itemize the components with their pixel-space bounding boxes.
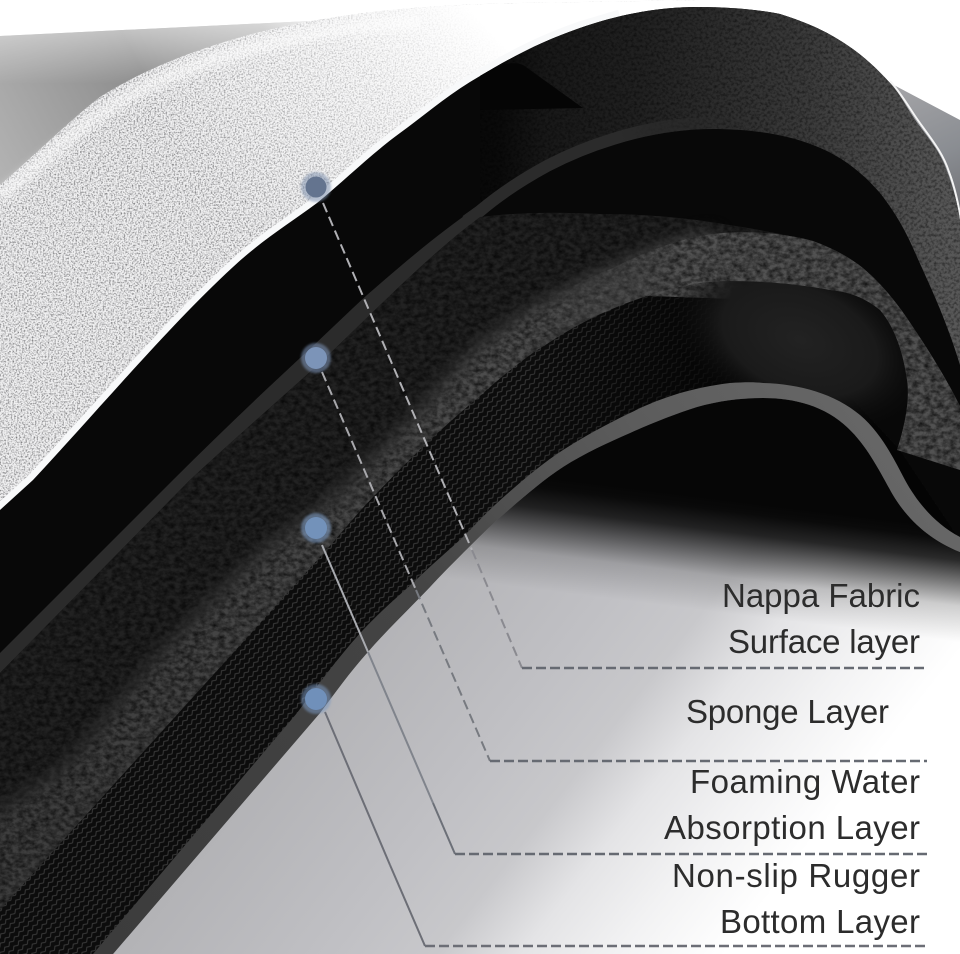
leader line: Sponge Layer	[322, 372, 927, 761]
layer: grey bottom edge band	[93, 382, 960, 954]
label: Non-slip Rugger Bottom Layer: Non-slip Rugger	[672, 857, 920, 894]
label: Non-slip Rugger Bottom Layer	[672, 857, 920, 940]
layer: nappa fabric surface	[0, 0, 700, 600]
panel: grey back of mat, top left	[0, 21, 340, 200]
label: Foaming Water Absorption Layer	[664, 763, 920, 846]
panel: grey shadow surface under the mat	[113, 398, 960, 954]
highlight: thin white edge, right	[890, 81, 960, 222]
label: Nappa Fabric Surface layer	[722, 577, 920, 660]
label: Sponge Layer: Sponge Layer	[686, 693, 889, 730]
layer: dark upper foam sponge	[0, 213, 813, 940]
label: Nappa Fabric Surface layer: Surface layer	[728, 623, 920, 660]
layer: soft lit foam, left part	[0, 234, 740, 954]
layer: foam water absorption underside	[643, 211, 957, 469]
marker dot: fabric layer	[301, 172, 331, 202]
marker dot: bottom layer	[301, 684, 331, 714]
marker dot: absorption layer	[301, 513, 331, 543]
layer: thin grey rim of surface layer	[0, 205, 480, 673]
leader line: Non-slip Rugger Bottom Layer	[325, 712, 927, 946]
label: Foaming Water Absorption Layer: Absorption Layer	[664, 809, 920, 846]
leader line: Nappa Fabric	[323, 203, 927, 668]
label: Foaming Water Absorption Layer: Foaming Water	[690, 763, 920, 800]
leader line: Foaming Water Absorption Layer	[322, 545, 927, 854]
panel: grey back of mat, right	[890, 83, 960, 245]
layer: lit foam water absorption band, right part	[480, 232, 960, 470]
marker dot: sponge layer	[301, 343, 331, 373]
label: Non-slip Rugger Bottom Layer: Bottom Layer	[720, 903, 920, 940]
layer: rugged non-slip mesh	[0, 296, 960, 954]
layer: dark top surface underside	[466, 7, 960, 365]
label: Nappa Fabric Surface layer: Nappa Fabric	[722, 577, 920, 614]
